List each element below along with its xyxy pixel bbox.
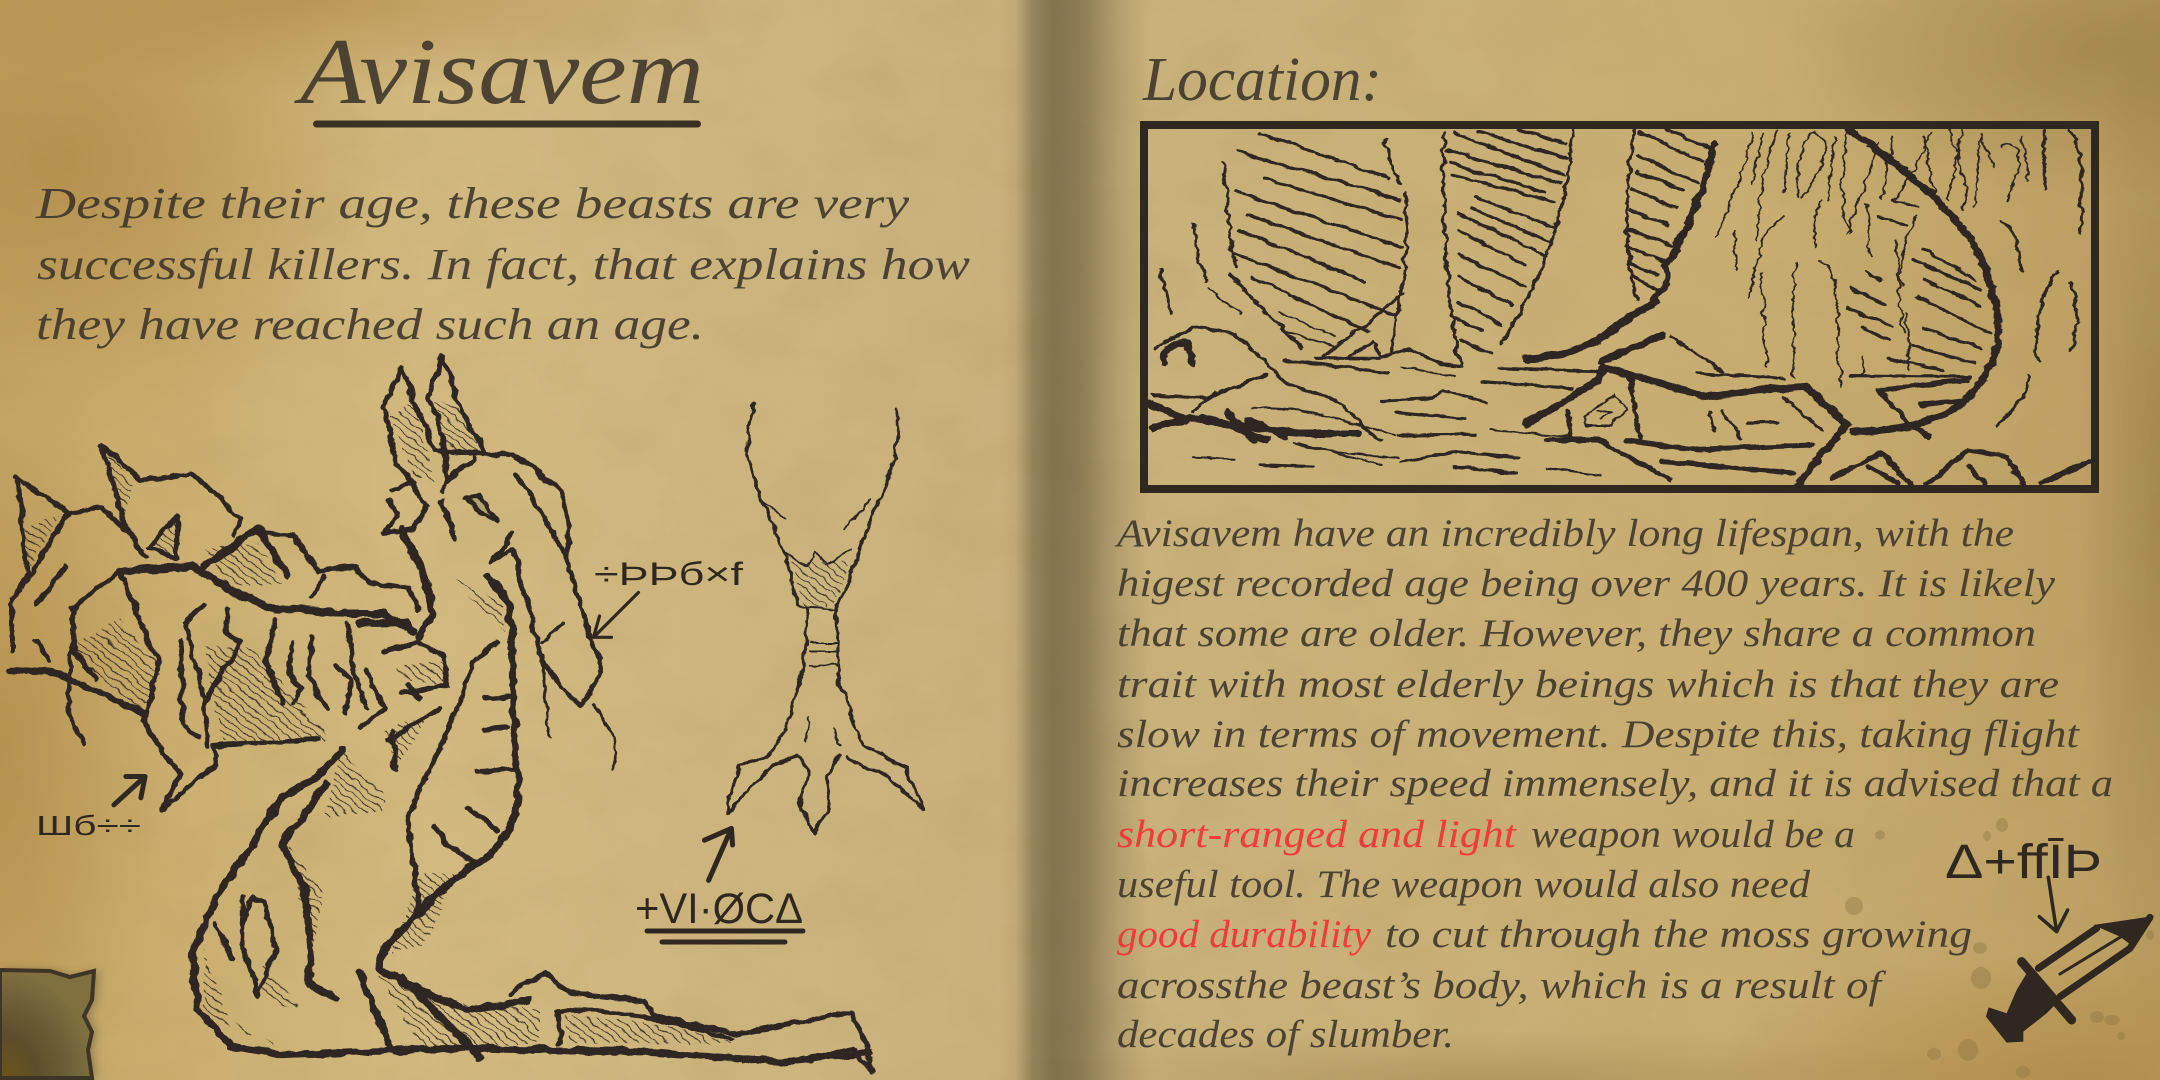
hatching on dragon <box>24 397 737 1048</box>
stains around sword <box>1845 818 2154 1078</box>
panel: forest sketch <box>1144 125 2095 489</box>
intro text block: Despite their age, these beasts are very <box>35 179 910 228</box>
arrow to head <box>594 592 638 637</box>
body text block: that some are older. However, they share a common <box>1117 612 2036 655</box>
sword <box>1986 916 2154 1043</box>
body text block: Avisavem have an incredibly long lifespan, with the <box>1114 512 2014 555</box>
intro text block: successful killers. In fact, that explains how <box>37 240 971 289</box>
heading: location: Location: <box>1142 46 1382 114</box>
torn corner hole <box>0 970 98 1078</box>
rune label foot: +VI·ØCΔ <box>635 885 803 933</box>
body text block: increases their speed immensely, and it is advised that a <box>1117 762 2113 805</box>
arrow to wing <box>114 777 145 805</box>
body text block: decades of slumber. <box>1117 1013 1454 1056</box>
highlight: good durability: good durability <box>1117 913 1372 956</box>
body text block: higest recorded age being over 400 years. It is likely <box>1117 562 2056 605</box>
arrow to foot <box>704 828 733 880</box>
forest lines <box>1149 128 2089 485</box>
body text block: to cut through the moss growing <box>1385 913 1972 956</box>
icon: sword with rune label <box>1845 818 2154 1078</box>
intro text block: they have reached such an age. <box>36 300 704 349</box>
rune label wing: Шб÷÷ <box>36 810 141 841</box>
title: Avisavem <box>293 20 704 124</box>
body text block: trait with most elderly beings which is that they are <box>1117 663 2059 706</box>
body text block: useful tool. The weapon would also need <box>1117 863 1811 906</box>
body text block: acrossthe beast’s body, which is a result of <box>1117 964 1887 1007</box>
intro text block <box>35 179 971 349</box>
body text block: weapon would be a <box>1531 813 1855 856</box>
dragon outline <box>9 357 872 1071</box>
body text block <box>1114 512 2113 1056</box>
illustration: bird foot <box>728 404 923 833</box>
arrows and rune labels <box>36 556 803 942</box>
sword rune label: Δ+ffĪÞ <box>1945 836 2102 889</box>
body text block: slow in terms of movement. Despite this, taking flight <box>1117 713 2080 756</box>
highlight: short-ranged and light: short-ranged and light <box>1117 813 1517 856</box>
rune label head: ÷ÞÞб×f <box>594 556 743 592</box>
illustration: dragon beast <box>9 357 872 1071</box>
rune label underlines <box>647 931 803 942</box>
arrow to sword <box>2039 877 2068 932</box>
